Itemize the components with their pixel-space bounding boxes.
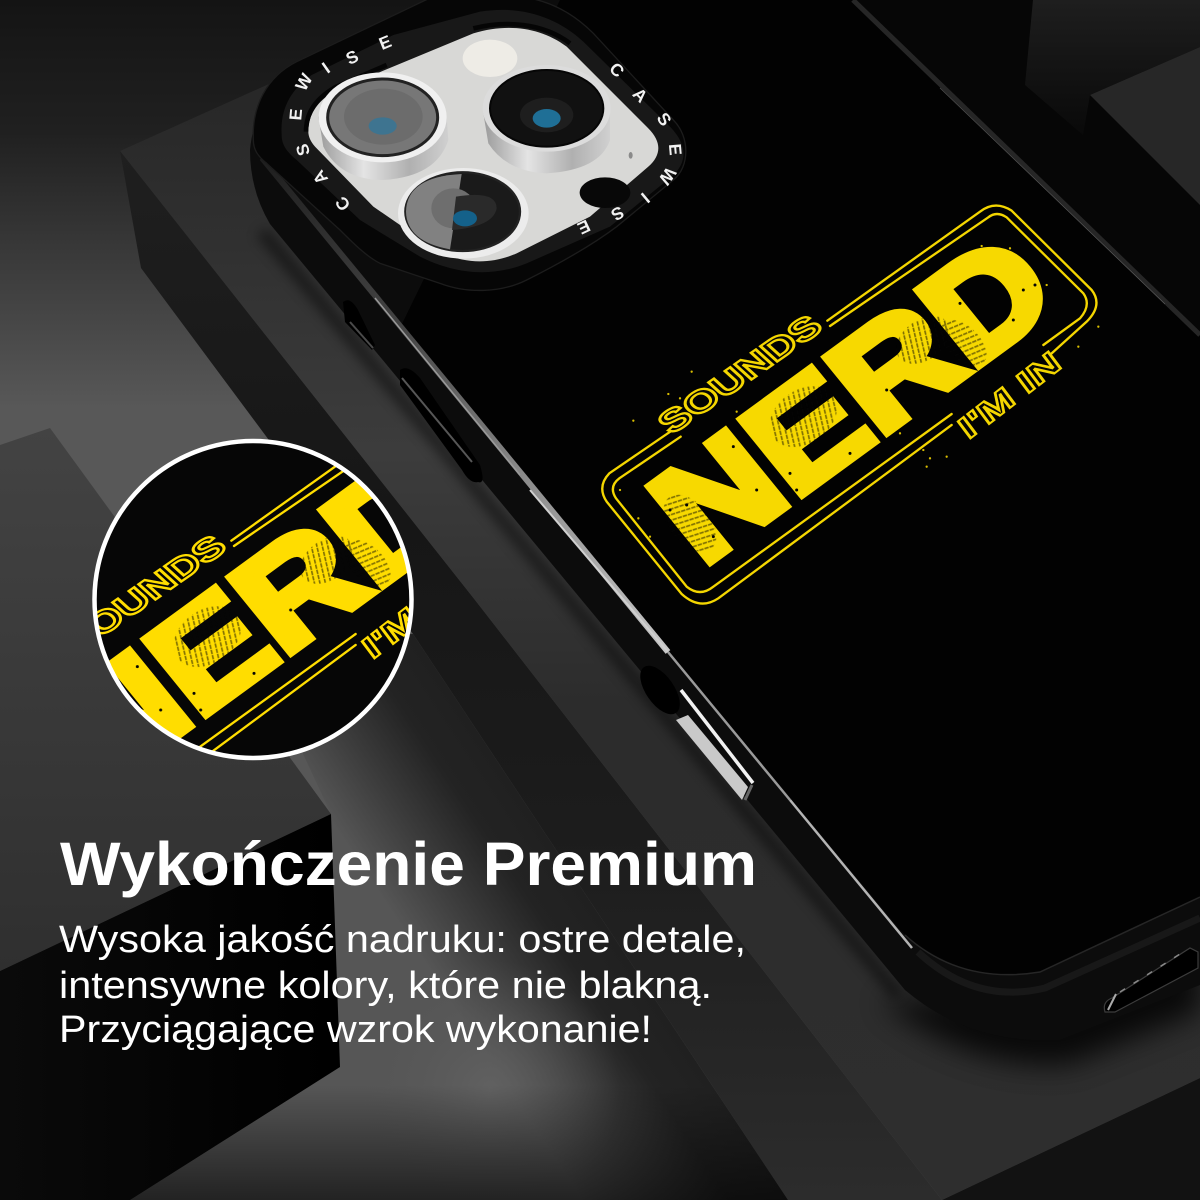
casewise lettering left: E: [285, 108, 306, 121]
casewise lettering left: I: [318, 58, 334, 77]
magnified logo: SOUNDS: [54, 529, 235, 660]
camera window plate: [308, 28, 658, 261]
casewise lettering right: I: [637, 189, 654, 207]
side camera button: [632, 659, 753, 800]
word sounds: SOUNDS: [650, 309, 831, 440]
phone edge highlights: [262, 158, 1200, 992]
flash: [463, 40, 517, 77]
phone: [250, 0, 1200, 1065]
words i'm in: I'M IN: [952, 345, 1067, 446]
description text: Wysoka jakość nadruku: ostre detale,: [59, 919, 746, 961]
casewise lettering right: [574, 58, 686, 239]
microphone hole: [580, 177, 630, 208]
magnified logo: [97, 466, 409, 751]
word nerd: NERD: [622, 205, 1082, 591]
casewise lettering left: A: [308, 166, 332, 188]
casewise lettering left: [285, 31, 394, 215]
phone shadow: [880, 960, 1200, 1065]
phone top edge: [853, 0, 1200, 335]
casewise lettering right: S: [653, 109, 676, 130]
magnified logo: NERD: [26, 425, 486, 811]
charging port: [1104, 948, 1198, 1012]
phone body: [250, 0, 1200, 1040]
lens 3: [398, 168, 529, 259]
camera module: [253, 0, 686, 290]
lens 2: [483, 65, 611, 173]
casewise lettering left: C: [331, 192, 354, 215]
casewise lettering left: W: [291, 69, 317, 94]
distressed print texture: [653, 306, 995, 562]
dark right corner: [942, 1078, 1200, 1200]
camera bump outer frame: [253, 0, 686, 290]
floor strip beside the lower block: [0, 634, 788, 1200]
casewise lettering left: E: [376, 31, 394, 54]
title: Wykończenie Premium: [60, 830, 757, 898]
logo inner frame: [830, 214, 1087, 345]
zoom circle detail: [92, 438, 414, 760]
block front face: [120, 151, 942, 1200]
casewise ring: [281, 10, 684, 272]
casewise lettering right: S: [608, 202, 628, 225]
phone back glossy face: [400, 0, 1200, 974]
casewise lettering right: E: [574, 216, 593, 239]
lower block top face: [0, 428, 331, 971]
circle white border: [94, 441, 412, 758]
casewise lettering right: C: [605, 58, 629, 82]
casewise lettering left: S: [292, 142, 314, 158]
top right dark blocks: [853, 0, 1200, 335]
magnified logo: I'M IN: [356, 565, 471, 666]
casewise lettering right: A: [629, 84, 652, 107]
logo outer frame: [602, 206, 1096, 604]
side button upper hole: [343, 300, 375, 350]
side button long: [400, 368, 483, 482]
description text: [59, 919, 746, 1051]
casewise lettering right: E: [665, 143, 686, 156]
lens 1: [318, 72, 448, 180]
casewise lettering right: W: [654, 164, 680, 189]
printed logo on phone: [602, 205, 1098, 604]
description text: intensywne kolory, które nie blakną.: [59, 965, 712, 1007]
ring inner dark edge: [306, 24, 570, 132]
casewise lettering left: S: [343, 46, 362, 69]
description text: Przyciągające wzrok wykonanie!: [59, 1009, 652, 1051]
lower block front face: [0, 814, 340, 1200]
